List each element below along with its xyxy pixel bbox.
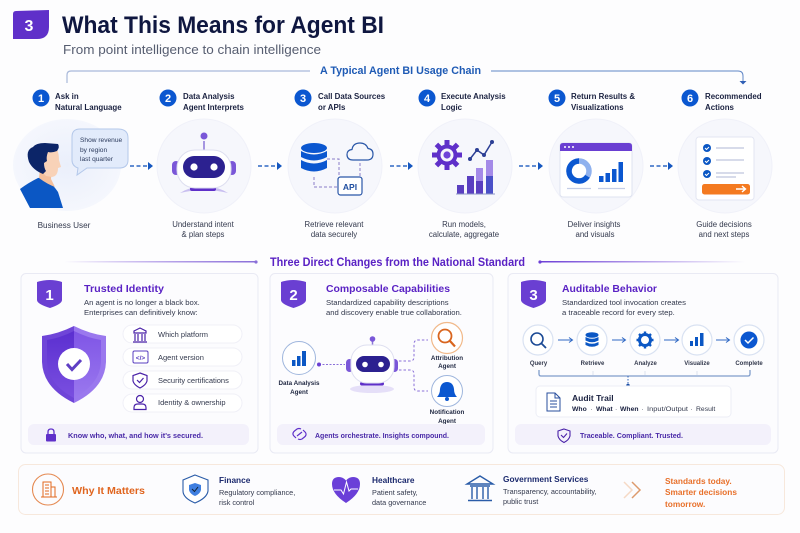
illustration: analysis logic bbox=[418, 119, 512, 213]
panel: trusted identity bbox=[21, 274, 258, 453]
icon: chevrons bbox=[624, 482, 640, 498]
step: retrieve: Retrieve bbox=[581, 361, 605, 367]
text: deliver insights bbox=[568, 220, 621, 239]
text: understand intent: Understand intent bbox=[172, 220, 235, 229]
badge 3: 3 bbox=[529, 287, 538, 304]
panel: composable capabilities bbox=[270, 274, 493, 453]
audit trail card: What bbox=[596, 406, 613, 413]
step 4 header bbox=[418, 90, 506, 112]
item: government services: Transparency, accountability, bbox=[503, 487, 597, 496]
section heading: three direct changes bbox=[64, 257, 745, 269]
step 6 header bbox=[682, 90, 762, 112]
donut chart bbox=[569, 161, 589, 181]
icon: attribution agent: Attribution bbox=[431, 355, 463, 362]
badge 2 bbox=[281, 280, 306, 308]
step 1 header: 1 bbox=[38, 93, 44, 105]
banner: why it matters bbox=[18, 464, 784, 514]
step 2 header: Data Analysis bbox=[183, 92, 235, 101]
arrow bbox=[612, 338, 626, 342]
text: run models bbox=[429, 220, 499, 239]
subtitle: From point intelligence to chain intelligence bbox=[63, 42, 321, 57]
item: government services: Government Services bbox=[503, 474, 589, 484]
icon: data analysis agent: Data Analysis bbox=[278, 380, 320, 387]
list row: security certifications: Security certifications bbox=[158, 376, 229, 385]
step 6 header: Actions bbox=[705, 103, 735, 112]
description: An agent is no longer a black box. bbox=[84, 298, 200, 307]
list row: security certifications bbox=[123, 371, 242, 389]
callout: Traceable. Compliant. Trusted. bbox=[580, 431, 683, 440]
text: guide decisions: and next steps bbox=[699, 230, 749, 239]
audit trail card: Result bbox=[696, 406, 715, 413]
closing statement: tomorrow. bbox=[665, 499, 705, 509]
audit trail card: · bbox=[615, 406, 617, 413]
item: government services: public trust bbox=[503, 497, 538, 506]
list row: which platform bbox=[123, 325, 242, 343]
arrow bbox=[558, 338, 572, 342]
description: Standardized capability descriptions bbox=[326, 298, 449, 307]
chain heading with connector bbox=[67, 65, 746, 84]
item: finance: Finance bbox=[219, 475, 251, 485]
icon: building bbox=[32, 474, 64, 505]
icon: database bbox=[301, 143, 327, 172]
arrow 2 to 3 bbox=[258, 162, 282, 170]
callout bbox=[515, 424, 771, 445]
icon: gear bbox=[432, 140, 462, 170]
list row: agent version: </> bbox=[136, 355, 145, 362]
step 4 header: Logic bbox=[441, 103, 463, 112]
icon: notification agent bbox=[430, 376, 464, 425]
panel: auditable behavior bbox=[508, 274, 778, 453]
step 4 header: Execute Analysis bbox=[441, 92, 506, 101]
text: guide decisions: Guide decisions bbox=[696, 220, 752, 229]
illustration: business user bbox=[13, 119, 128, 211]
illustration: dashboard bbox=[549, 119, 643, 213]
step 2 header bbox=[160, 90, 245, 112]
description: a traceable record for every step. bbox=[562, 308, 675, 317]
audit trail card: When bbox=[620, 406, 638, 413]
badge 1: 1 bbox=[45, 287, 54, 304]
item: healthcare: data governance bbox=[372, 498, 426, 507]
speech bubble: last quarter bbox=[80, 156, 114, 163]
text: retrieve relevant: Retrieve relevant bbox=[305, 220, 364, 229]
step 3 header bbox=[294, 90, 386, 112]
text: guide decisions bbox=[696, 220, 752, 239]
connectors to agents bbox=[399, 340, 428, 391]
callout: Agents orchestrate. Insights compound. bbox=[315, 431, 449, 440]
item: healthcare: Healthcare bbox=[372, 475, 415, 485]
step 6 header: Recommended bbox=[705, 92, 762, 101]
icon: trend line bbox=[468, 140, 494, 161]
step: visualize: Visualize bbox=[684, 361, 710, 367]
step 5 header: Visualizations bbox=[571, 103, 624, 112]
icon: large shield bbox=[42, 326, 106, 403]
bar chart bbox=[599, 162, 623, 182]
arrow bbox=[664, 338, 678, 342]
heading: Composable Capabilities bbox=[326, 284, 450, 295]
heading: Trusted Identity bbox=[84, 284, 164, 295]
text: understand intent: & plan steps bbox=[182, 230, 225, 239]
item: finance: risk control bbox=[219, 498, 255, 507]
item: healthcare: Patient safety, bbox=[372, 488, 418, 497]
connector to orchestrator bbox=[319, 364, 345, 366]
item: finance: Regulatory compliance, bbox=[219, 488, 295, 497]
step: analyze: Analyze bbox=[634, 361, 657, 367]
badge 2: 2 bbox=[289, 287, 298, 304]
bracket connecting steps to audit trail bbox=[539, 370, 750, 387]
audit trail card: · bbox=[590, 406, 593, 413]
arrow 3 to 4 bbox=[390, 162, 413, 170]
arrow 1 to 2 bbox=[130, 162, 153, 170]
text: run models: Run models, bbox=[442, 220, 486, 229]
step 5 header: Return Results & bbox=[571, 92, 635, 101]
description: Standardized tool invocation creates bbox=[562, 298, 686, 307]
step: analyze bbox=[630, 325, 660, 367]
step: retrieve bbox=[577, 325, 607, 367]
closing statement: Smarter decisions bbox=[665, 487, 737, 497]
audit trail card: · bbox=[690, 406, 693, 413]
icon: orchestrator robot bbox=[346, 336, 398, 393]
orange action button bbox=[702, 184, 750, 194]
icon: notification agent: Agent bbox=[438, 418, 457, 425]
audit trail card: Who bbox=[572, 406, 587, 413]
step 1 header: Natural Language bbox=[55, 103, 122, 112]
step 1 header bbox=[32, 90, 122, 112]
step 5 header: 5 bbox=[554, 93, 560, 105]
audit trail card bbox=[536, 386, 731, 417]
arrow bbox=[716, 338, 730, 342]
step: query bbox=[523, 325, 553, 367]
badge 3 bbox=[521, 280, 546, 308]
step 3 header: or APIs bbox=[318, 103, 346, 112]
closing statement: Standards today. bbox=[665, 476, 732, 486]
callout bbox=[28, 424, 249, 445]
speech bubble: by region bbox=[80, 147, 107, 154]
icon: attribution agent: Agent bbox=[438, 363, 457, 370]
description: and discovery enable true collaboration. bbox=[326, 308, 462, 317]
step 3 header: Call Data Sources bbox=[318, 92, 386, 101]
label: business user: Business User bbox=[38, 221, 91, 230]
item: healthcare bbox=[332, 475, 426, 507]
text: retrieve relevant bbox=[305, 220, 364, 239]
description bbox=[326, 298, 462, 317]
text: retrieve relevant: data securely bbox=[311, 230, 357, 239]
description: Enterprises can definitively know: bbox=[84, 308, 198, 317]
icon: document bbox=[547, 393, 560, 411]
badge 1 bbox=[37, 280, 62, 308]
callout bbox=[277, 424, 485, 445]
list row: agent version bbox=[123, 348, 242, 366]
illustration: recommended actions bbox=[678, 119, 772, 213]
closing statement bbox=[665, 476, 737, 509]
icon: data analysis agent: Agent bbox=[290, 389, 309, 396]
list row: identity and ownership bbox=[123, 394, 242, 412]
callout: Know who, what, and how it's secured. bbox=[68, 431, 203, 440]
step: query: Query bbox=[530, 361, 548, 367]
heading: Why It Matters bbox=[72, 485, 145, 497]
text: deliver insights: Deliver insights bbox=[568, 220, 621, 229]
audit trail card: Input/Output bbox=[647, 406, 688, 413]
item: government services bbox=[467, 474, 597, 506]
text: understand intent bbox=[172, 220, 235, 239]
icon: API box: API bbox=[343, 182, 357, 192]
step: complete bbox=[734, 325, 764, 367]
speech bubble bbox=[72, 129, 128, 175]
description bbox=[562, 298, 686, 317]
illustration: data sources and API bbox=[288, 119, 382, 213]
step 1 header: Ask in bbox=[55, 92, 79, 101]
step 2 header: Agent Interprets bbox=[183, 103, 245, 112]
icon: notification agent: Notification bbox=[430, 409, 464, 416]
speech bubble: Show revenue bbox=[80, 137, 122, 144]
text: run models: calculate, aggregate bbox=[429, 230, 499, 239]
section badge: 3 bbox=[25, 18, 34, 35]
step 6 header: 6 bbox=[687, 93, 693, 105]
icon: cloud bbox=[347, 143, 373, 160]
icon: data analysis agent bbox=[278, 342, 320, 396]
step 3 header: 3 bbox=[300, 93, 306, 105]
audit trail card: · bbox=[642, 406, 644, 413]
step: visualize bbox=[682, 325, 712, 367]
heading: Auditable Behavior bbox=[562, 284, 657, 295]
section badge bbox=[13, 10, 49, 39]
list row: agent version: Agent version bbox=[158, 353, 204, 362]
item: finance bbox=[183, 475, 295, 507]
audit trail card: Audit Trail bbox=[572, 393, 614, 403]
step 5 header bbox=[548, 90, 635, 112]
section heading: three direct changes: Three Direct Changes from the National Standard bbox=[270, 257, 525, 269]
arrow 5 to 6 bbox=[650, 162, 673, 170]
icon: attribution agent bbox=[431, 322, 463, 370]
arrow 4 to 5 bbox=[519, 162, 543, 170]
description bbox=[84, 298, 200, 317]
title: What This Means for Agent BI bbox=[62, 12, 384, 39]
step 2 header: 2 bbox=[165, 93, 171, 105]
bar chart bbox=[456, 160, 495, 194]
list row: identity and ownership: Identity & ownership bbox=[158, 398, 226, 407]
chain heading with connector: A Typical Agent BI Usage Chain bbox=[320, 65, 481, 77]
step 4 header: 4 bbox=[424, 93, 431, 105]
text: deliver insights: and visuals bbox=[575, 230, 615, 239]
illustration: data analysis agent robot bbox=[157, 119, 251, 213]
list row: which platform: Which platform bbox=[158, 330, 208, 339]
step: complete: Complete bbox=[735, 361, 763, 367]
